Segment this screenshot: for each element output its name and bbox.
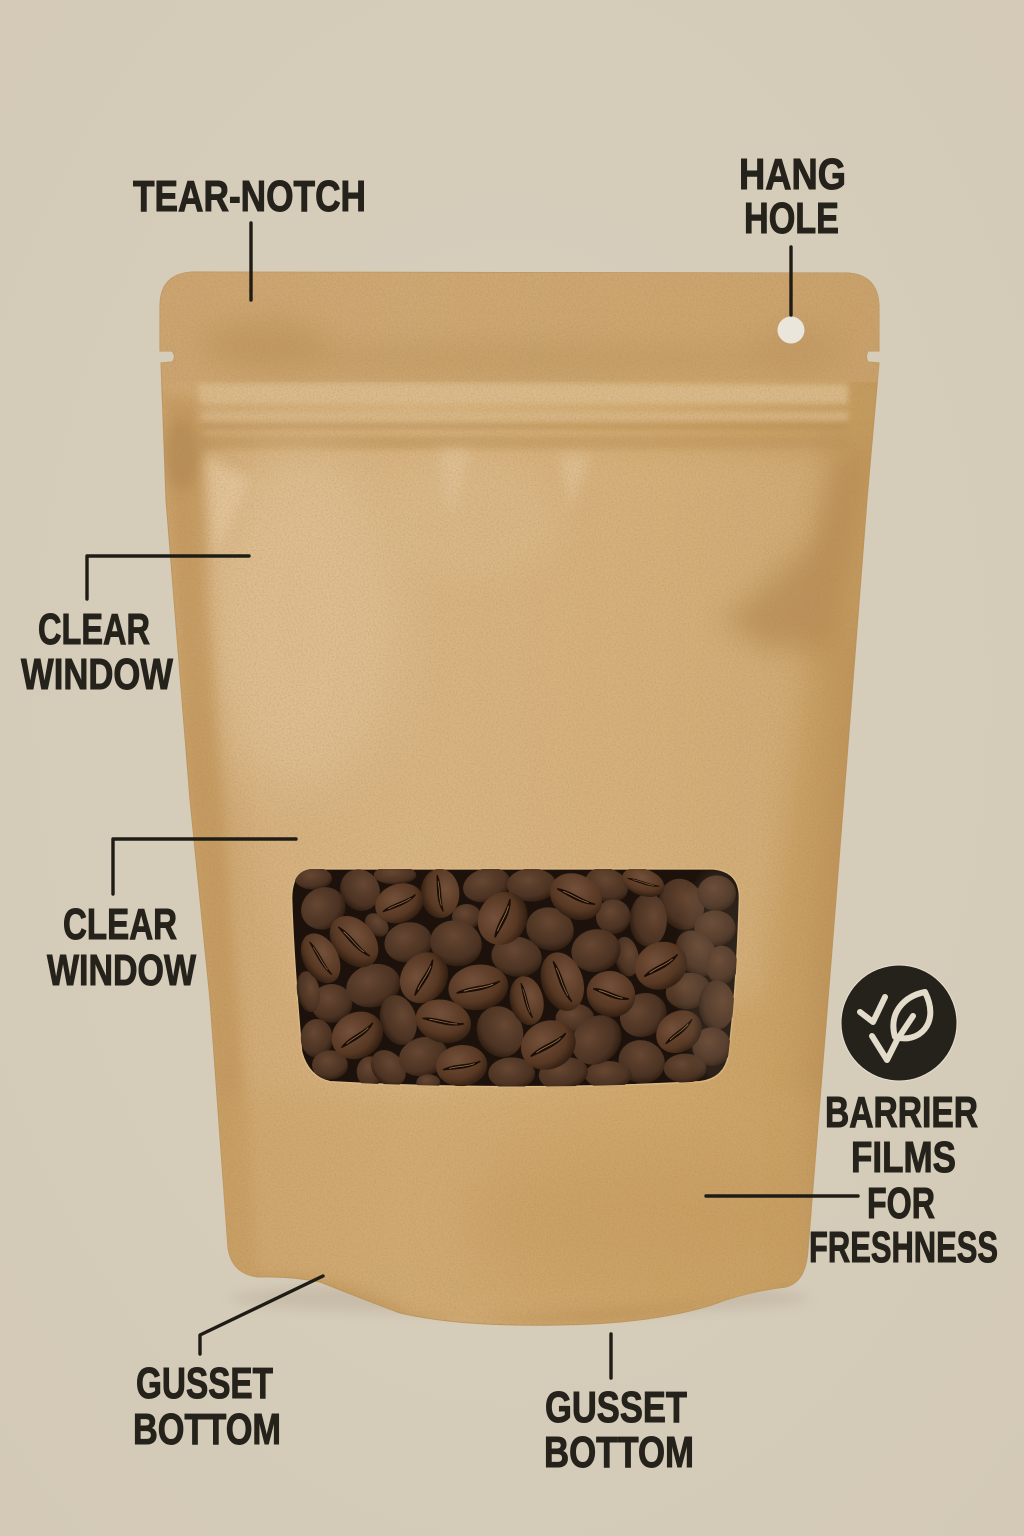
top panel creases [205,450,590,560]
label: barrier films for freshness: FOR [867,1179,935,1228]
label: gusset bottom center: BOTTOM [544,1428,694,1477]
hang hole [778,316,804,344]
kraft pouch [150,265,890,1335]
label: gusset bottom left [133,1276,323,1454]
label: gusset bottom center [544,1334,694,1477]
label: gusset bottom left: BOTTOM [133,1405,281,1454]
label: clear window lower: CLEAR [63,900,177,949]
right crease shading [726,462,860,658]
label: tear-notch: TEAR-NOTCH [133,172,366,221]
upper panel highlight [274,452,824,998]
window haze [682,870,739,1078]
clear window with coffee beans [292,862,753,1094]
lower panel tone [258,1101,802,1316]
label: hang hole: HANG [739,150,846,199]
label: hang hole: HOLE [744,194,839,243]
label: clear window lower: WINDOW [47,946,196,995]
background beans [293,862,738,1094]
label: clear window upper: CLEAR [38,605,150,654]
label: barrier films for freshness: BARRIER [825,1088,978,1137]
paper grain [150,265,890,1335]
label: clear window upper: WINDOW [21,650,173,699]
icon: leaf badge [841,965,957,1081]
label: clear window lower [47,839,296,995]
pouch shadow [230,1282,810,1314]
side gusset shading [162,395,258,1280]
zipper ridges [198,384,848,450]
seal shadows [210,320,793,372]
label: clear window upper [21,556,249,699]
label: barrier films for freshness: FILMS [851,1133,956,1182]
label: hang hole [739,150,846,315]
label: gusset bottom center: GUSSET [545,1383,687,1432]
label: gusset bottom left: GUSSET [136,1359,273,1408]
foreground beans [293,862,710,1088]
top seal band [160,272,880,382]
label: barrier films for freshness [706,1088,998,1272]
